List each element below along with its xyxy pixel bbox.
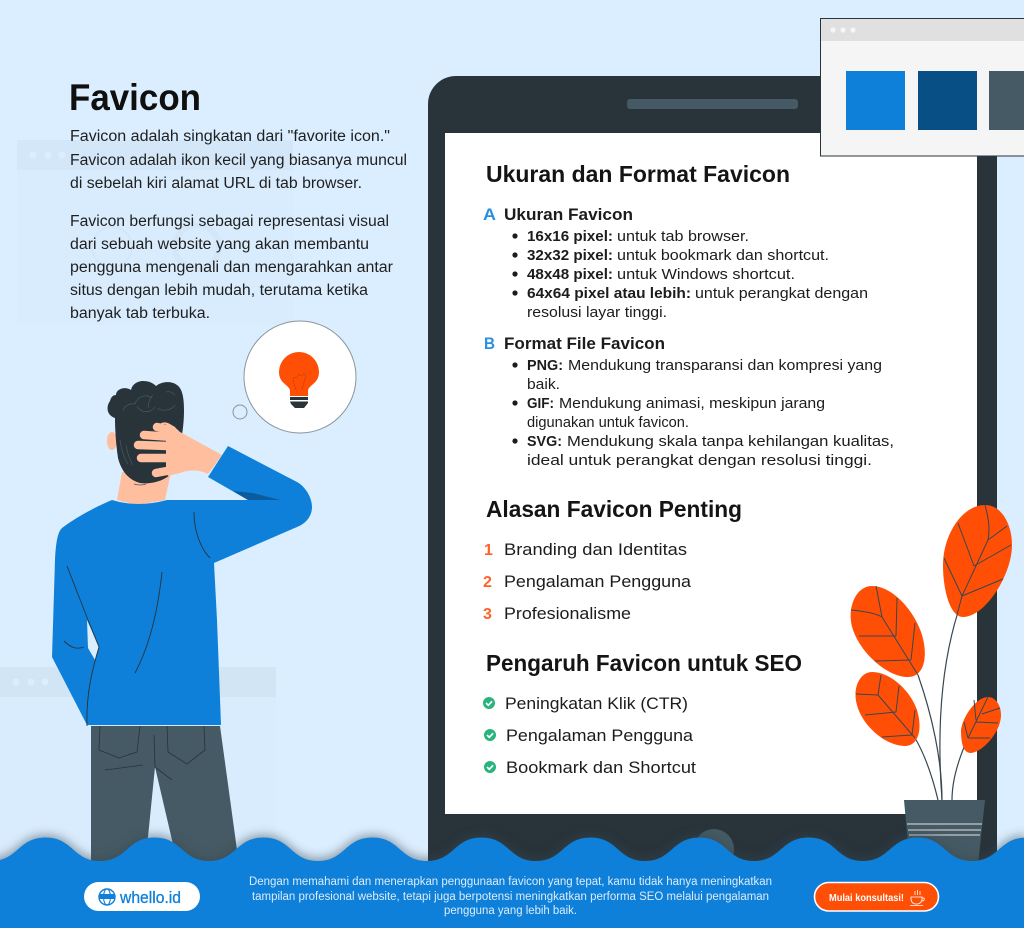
section B: format file favicon: B xyxy=(484,334,495,353)
intro text block: Favicon berfungsi sebagai representasi visual xyxy=(70,213,389,230)
intro text block: banyak tab terbuka. xyxy=(70,305,210,322)
numbered list: 1 xyxy=(484,542,493,559)
footer message: Dengan memahami dan menerapkan penggunaan favicon yang tepat, kamu tidak hanya meningkatkan xyxy=(249,876,772,888)
section A: ukuran favicon: 48x48 pixel: xyxy=(527,267,613,283)
leaf: lower left xyxy=(855,672,920,746)
title: Favicon xyxy=(69,77,201,118)
section B: format file favicon: Mendukung animasi, meskipun jarang xyxy=(559,396,825,412)
wave footer band xyxy=(0,838,1024,928)
footer message xyxy=(249,876,772,917)
leaf: middle left xyxy=(851,586,925,677)
section A: ukuran favicon: untuk Windows shortcut. xyxy=(617,267,795,283)
tablet device xyxy=(428,76,997,880)
intro text block: dari sebuah website yang akan membantu xyxy=(70,236,369,253)
section A: ukuran favicon: 32x32 pixel: xyxy=(527,248,613,264)
heading: alasan favicon penting: Alasan Favicon Penting xyxy=(486,496,742,522)
thought bubble with light bulb xyxy=(233,321,356,433)
leaf: small right xyxy=(961,697,1001,753)
intro text block: Favicon adalah singkatan dari "favorite icon." xyxy=(70,128,390,145)
section B: format file favicon: baik. xyxy=(527,377,560,393)
check list xyxy=(483,694,696,777)
section B: format file favicon xyxy=(484,334,894,469)
numbered list: Branding dan Identitas xyxy=(504,540,687,559)
leaf: top right xyxy=(943,505,1012,617)
section A: ukuran favicon: resolusi layar tinggi. xyxy=(527,305,667,321)
numbered list: 3 xyxy=(483,606,492,623)
brand pill: whello.id xyxy=(84,882,200,911)
section B: format file favicon: PNG: xyxy=(527,358,563,374)
numbered list: 2 xyxy=(483,574,492,591)
person looking up, thinking xyxy=(52,381,312,870)
section A: ukuran favicon: A xyxy=(483,205,496,224)
leaf veins xyxy=(851,505,1011,738)
plant illustration xyxy=(851,505,1012,865)
call to action button: Mulai konsultasi! xyxy=(829,893,904,904)
check list: Pengalaman Pengguna xyxy=(506,726,694,745)
heading: pengaruh favicon untuk SEO: Pengaruh Favicon untuk SEO xyxy=(486,650,802,676)
footer message: pengguna yang lebih baik. xyxy=(444,905,577,917)
numbered list: Profesionalisme xyxy=(504,604,631,623)
section A: ukuran favicon: Ukuran Favicon xyxy=(504,205,633,224)
intro text block: Favicon adalah ikon kecil yang biasanya muncul xyxy=(70,152,407,169)
background window top left xyxy=(17,140,293,325)
check list: Peningkatan Klik (CTR) xyxy=(505,694,688,713)
section B: format file favicon: SVG: xyxy=(527,434,562,450)
background window bottom left xyxy=(0,667,276,867)
browser window top right xyxy=(820,18,1024,156)
heading: ukuran dan format: Ukuran dan Format Favicon xyxy=(486,161,790,187)
intro text block: situs dengan lebih mudah, terutama ketika xyxy=(70,282,368,299)
section B: format file favicon: Format File Favicon xyxy=(504,334,665,353)
intro text block: pengguna mengenali dan mengarahkan antar xyxy=(70,259,393,276)
section A: ukuran favicon: untuk tab browser. xyxy=(617,229,749,245)
wave footer shadow xyxy=(0,835,1024,928)
section A: ukuran favicon xyxy=(483,205,868,321)
section A: ukuran favicon: 64x64 pixel atau lebih: xyxy=(527,286,691,302)
numbered list: Pengalaman Pengguna xyxy=(504,572,692,591)
section B: format file favicon: GIF: xyxy=(527,396,554,412)
section A: ukuran favicon: untuk bookmark dan shortcut. xyxy=(617,248,829,264)
check list: Bookmark dan Shortcut xyxy=(506,758,696,777)
section B: format file favicon: digunakan untuk favicon. xyxy=(527,415,689,431)
section B: format file favicon: Mendukung skala tanpa kehilangan kualitas, xyxy=(567,434,894,450)
section A: ukuran favicon: untuk perangkat dengan xyxy=(695,286,868,302)
intro text block: di sebelah kiri alamat URL di tab browser. xyxy=(70,175,362,192)
section B: format file favicon: ideal untuk perangkat dengan resolusi tinggi. xyxy=(527,453,872,469)
intro text block xyxy=(70,128,407,322)
section B: format file favicon: Mendukung transparansi dan kompresi yang xyxy=(568,358,882,374)
footer message: tampilan profesional website, tetapi juga berpotensi meningkatkan performa SEO melalui pengalaman xyxy=(252,891,769,903)
call to action button xyxy=(814,882,938,911)
brand pill: whello.id: whello.id xyxy=(119,888,181,907)
section A: ukuran favicon: 16x16 pixel: xyxy=(527,229,613,245)
numbered list xyxy=(483,540,692,623)
